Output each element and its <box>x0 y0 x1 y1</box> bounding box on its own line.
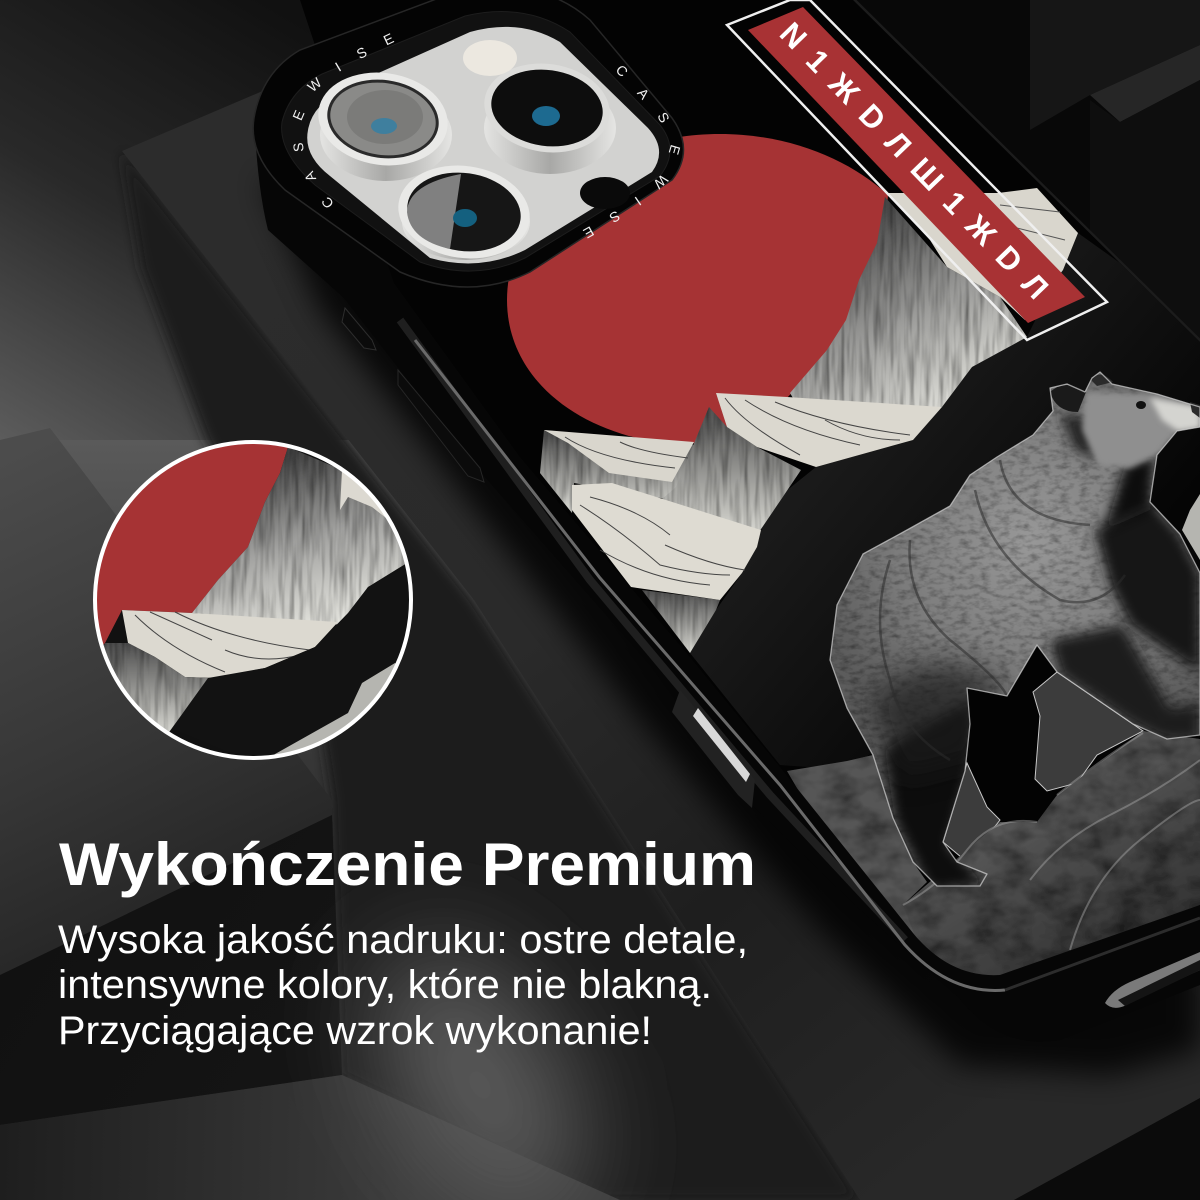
red sun <box>507 134 888 445</box>
brand text <box>292 33 680 238</box>
brand text: CASEWISE <box>292 33 394 208</box>
case body <box>255 0 1200 1042</box>
back artwork <box>300 0 1200 1000</box>
bump inner band <box>282 12 670 271</box>
label: red strip with runes <box>727 0 1107 340</box>
lens top right <box>478 56 616 174</box>
description: intensywne kolory, które nie blakną. <box>58 963 712 1007</box>
label: red strip with runes: N1ЖDЛШ1ЖDЛ <box>773 16 1055 306</box>
brand text: CASEWISE <box>582 66 680 238</box>
bottom port <box>1105 952 1200 1008</box>
description <box>58 918 748 1053</box>
shadow cast by phone <box>262 180 1200 1075</box>
bear <box>830 372 1200 890</box>
title: Wykończenie Premium <box>59 831 756 898</box>
phone case <box>255 0 1200 1042</box>
flash <box>463 40 517 76</box>
rocks <box>787 731 1200 985</box>
bump frame <box>253 0 684 287</box>
bear shading <box>870 392 1200 890</box>
side button: small <box>342 308 376 350</box>
bear ears <box>1050 385 1086 412</box>
lens bottom <box>392 157 536 267</box>
dark ink wash <box>690 233 1200 770</box>
bear eye and nose <box>1136 401 1146 409</box>
camera window <box>307 27 659 263</box>
camera bump <box>254 0 684 288</box>
side button: silver <box>672 690 755 808</box>
description: Wysoka jakość nadruku: ostre detale, <box>58 918 748 962</box>
light pool on block face <box>331 913 629 1200</box>
left mountain <box>540 430 694 513</box>
middle mountain <box>661 393 942 535</box>
text block <box>58 831 756 1053</box>
back mountain snow <box>887 188 1078 320</box>
lens top left <box>312 64 454 181</box>
bear outline <box>830 372 1200 886</box>
lower mountain <box>572 483 761 653</box>
sensor <box>580 177 630 209</box>
far rock slopes behind legs <box>943 494 1200 862</box>
side button: long <box>398 370 484 482</box>
back mountain <box>790 188 1078 410</box>
inset artwork <box>97 444 405 755</box>
middle mountain snow <box>716 393 942 467</box>
description: Przyciągające wzrok wykonanie! <box>58 1009 652 1053</box>
detail zoom circle <box>90 440 420 765</box>
case edge highlight <box>400 320 905 940</box>
